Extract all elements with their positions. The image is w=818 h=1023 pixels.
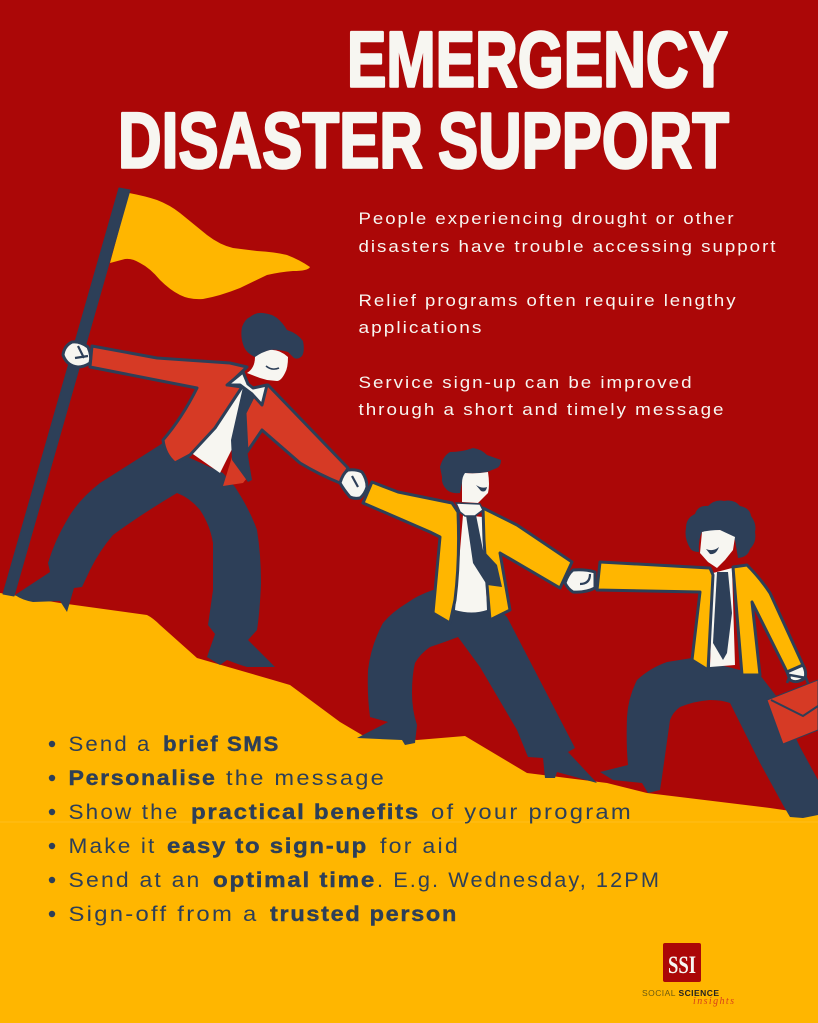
figure: leader in red jacket [15, 313, 348, 667]
bullet: easy to sign-up: for aid [380, 835, 460, 858]
paragraph: access problem [358, 209, 778, 256]
face [247, 350, 288, 381]
flag [110, 193, 310, 299]
figure: rear climber with briefcase [597, 501, 818, 818]
right jacket panel and sleeve [733, 565, 803, 675]
logo wordmark: SOCIAL SCIENCE [642, 988, 719, 998]
bullet: optimal time [49, 869, 661, 892]
bullet: trusted person: Sign-off from a [68, 903, 258, 926]
shirt [190, 385, 255, 473]
briefcase [767, 675, 818, 744]
hair [440, 448, 501, 493]
bullet: optimal time: . E.g. Wednesday, 12PM [377, 869, 661, 892]
figure: middle climber in yellow jacket [340, 448, 597, 783]
left sleeve and jacket panel [597, 562, 713, 670]
tie [231, 387, 255, 482]
bullet: practical benefits: Show the [68, 801, 180, 824]
tie [466, 515, 502, 587]
bullet: optimal time: Send at an [68, 869, 202, 892]
shirt [710, 568, 735, 667]
logo badge [663, 943, 701, 982]
trousers [15, 443, 275, 667]
mouth [476, 485, 487, 492]
smile [266, 366, 279, 369]
hair [686, 501, 756, 558]
jacket hem [223, 457, 247, 486]
yellow hillside [0, 593, 818, 1023]
bullet: practical benefits: of your program [431, 801, 633, 824]
pole [3, 188, 130, 596]
paragraph: access problem: People experiencing drought or other [358, 209, 736, 228]
logo monogram: SSI [668, 952, 696, 979]
paragraph: access problem: disasters have trouble accessing support [358, 237, 778, 256]
title line: disaster support: DISASTER [118, 96, 423, 184]
title [118, 14, 729, 184]
clasped hands: leader and middle climber [340, 470, 367, 498]
paragraph: lengthy applications: Relief programs often require lengthy [358, 291, 738, 310]
collar [227, 372, 267, 405]
title line: disaster support [118, 96, 729, 184]
trousers [357, 590, 597, 783]
right jacket panel and sleeve [483, 508, 572, 620]
bullet: easy to sign-up: easy to sign-up [167, 835, 368, 858]
bullet list [49, 733, 661, 926]
bullet: personalise [49, 767, 386, 790]
bullet: practical benefits: practical benefits [191, 801, 420, 824]
bullet: easy to sign-up: Make it [68, 835, 156, 858]
bullet: easy to sign-up [49, 835, 460, 858]
bullet: optimal time: optimal time [213, 869, 376, 892]
logo: Social Science Insights [642, 943, 734, 1007]
icon: flag and pole [3, 188, 310, 596]
logo script: insights [693, 996, 734, 1007]
paragraph: lengthy applications [358, 291, 738, 337]
face [700, 530, 735, 568]
right arm [245, 385, 348, 483]
paragraph: improved sign-up: through a short and timely message [358, 400, 726, 419]
shirt [455, 515, 487, 612]
collar [456, 503, 483, 516]
right hand [565, 570, 595, 592]
bullet: brief SMS [49, 733, 280, 756]
paragraph: improved sign-up: Service sign-up can be improved [358, 373, 694, 392]
bullet: brief SMS: brief SMS [163, 733, 280, 756]
bullet: personalise: Personalise [68, 767, 216, 790]
mouth [706, 547, 719, 554]
hand holding briefcase [787, 665, 806, 682]
tie [713, 572, 732, 660]
left hand on pole [63, 342, 91, 367]
bullet: practical benefits [49, 801, 633, 824]
title line: disaster support: SUPPORT [438, 96, 729, 184]
bullet: trusted person [49, 903, 458, 926]
paragraph: lengthy applications: applications [358, 318, 484, 337]
paragraph: improved sign-up [358, 373, 726, 419]
jacket body and left arm [90, 346, 247, 463]
bullet: trusted person: trusted person [270, 903, 458, 926]
left sleeve and jacket panel [363, 482, 459, 623]
hair [241, 313, 304, 359]
trousers [600, 658, 818, 818]
face [462, 472, 489, 503]
intro text block [358, 209, 778, 419]
bullet: personalise: the message [226, 767, 386, 790]
bullet: brief SMS: Send a [68, 733, 152, 756]
